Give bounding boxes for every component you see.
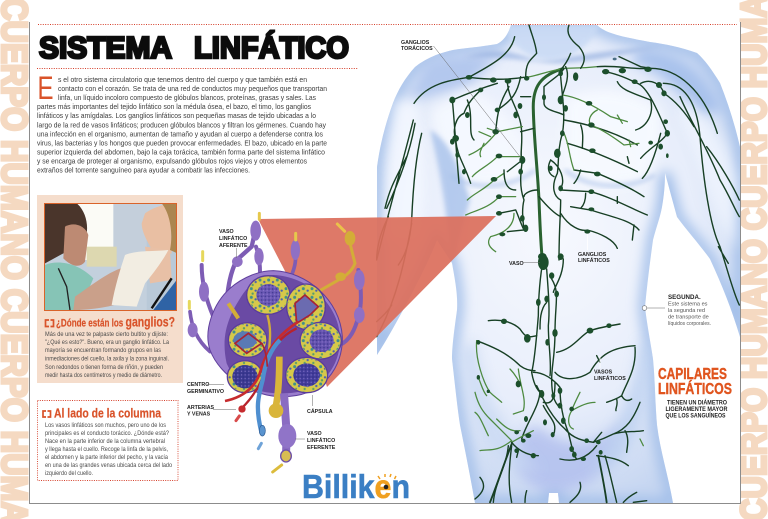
panel text: en una de las grandes venas ubicada cerca del lado [45,462,172,469]
label: ganglios linfaticos [578,234,610,264]
body figure [377,25,740,503]
lymphatic vessels of the arms [663,83,739,305]
label: vaso linfatico eferente: LINFÁTICO [307,437,335,444]
callout: segunda [642,294,711,327]
label: centro germinativo [187,382,224,395]
label: ganglios toracicos [401,40,521,158]
label: centro germinativo: GERMINATIVO [187,389,224,395]
label: vaso linfatico aferente: LINFÁTICO [219,235,247,242]
callout: capilares linfaticos [658,366,732,420]
dotted rule top [38,24,737,26]
label: vaso: VASO [509,261,524,267]
label: arterias y venas: Y VENAS [187,412,211,418]
intro text block: extraños del torrente sanguíneo para ayudar a combatir las infecciones. [37,166,250,174]
label: vaso linfatico eferente [295,431,336,451]
label: capsula [307,395,333,415]
panel text: Más de una vez te palpaste cierto bultito y dijiste: [45,331,168,338]
label: vaso linfatico aferente: VASO [219,229,234,235]
icon: bracket [46,320,54,326]
photo: doctor palpating neck [44,203,177,310]
label: ganglios toracicos: GANGLIOS [401,40,430,46]
label: vasos linfaticos: VASOS [594,370,613,376]
intro text block: una infección en el organismo, aumentan de tamaño y ayudan al cuerpo a defenderse contra los [37,129,323,138]
label: vaso linfatico eferente: EFERENTE [307,445,336,451]
lymphatic vessels of the chest and arms [414,25,717,260]
panel text: medir hasta dos centímetros y medio de diámetro. [45,372,162,379]
arrows [189,213,345,472]
hilum vessels [225,303,298,455]
panel text: el abdomen y la parte inferior del pecho, y la vacía [45,454,168,461]
label: vaso linfatico aferente: AFERENTE [219,243,248,249]
lymphatic vessels of the abdomen and pelvis [475,255,647,502]
label: arterias y venas: ARTERIAS [187,405,215,411]
label: arterias y venas [187,405,236,418]
intro text block: superior izquierda del abdomen, bajo la caja torácica, también forma parte del sistema linfático [37,147,325,156]
callout: segunda: la segunda red [668,308,705,314]
intro text block: linfa, un líquido incoloro compuesto de glóbulos blancos, proteínas, grasas y sales. Las [58,93,316,102]
intro text block: s el otro sistema circulatorio que tenemos dentro del cuerpo y que también está en [58,75,307,84]
label: vaso [509,261,540,267]
magnification wedge [258,216,496,387]
label: vaso linfatico aferente [219,229,248,258]
lobules [227,276,341,393]
panel heading: ¿Dónde están los ganglios? [56,314,175,330]
callout: segunda: SEGUNDA. [668,294,701,301]
label: centro germinativo: CENTRO [187,382,209,388]
callout: capilares linfaticos: QUE LOS SANGUÍNEOS [666,412,726,420]
lymph node illustration [188,213,365,472]
panel text: principales es el conducto torácico. ¿Dónde está? [45,430,169,437]
intro text block: largo de la red de vasos linfáticos; producen glóbulos blancos y filtran los gérmenes. Cuando hay [37,120,326,129]
label: ganglios linfaticos: GANGLIOS [578,252,607,258]
panel text [45,422,172,477]
intro text block: partes más importantes del tejido linfático son la médula ósea, el bazo, el timo, los ganglios [37,102,311,111]
Billiken logo: Billiken [302,468,410,505]
panel text: Son redondos o tienen forma de riñón, y pueden [45,364,163,371]
intro text block: contacto con el corazón. Se trata de una red de conductos muy pequeños que transportan [58,84,327,93]
label: ganglios toracicos: TORÁCICOS [401,45,433,52]
callout: capilares linfaticos: CAPILARES [658,366,727,383]
panel text: Nace en la parte inferior de la columna vertebral [45,438,165,445]
label: vaso linfatico eferente: VASO [307,431,322,437]
intro text block [37,70,327,174]
panel text [45,331,169,379]
panel text: mayoría se encuentran formando grupos en las [45,347,162,354]
callout: capilares linfaticos: LIGERAMENTE MAYOR [666,406,728,413]
lymph nodes of the chest [450,58,670,260]
dotted rule under title [37,68,358,70]
callout: segunda: Este sistema es [668,302,708,308]
title: SISTEMA [39,30,172,65]
intro text block: linfáticos y las amígdalas. Los ganglios linfáticos son pequeñas masas de tejido ubicadas a lo [37,111,316,120]
callout: capilares linfaticos: LINFÁTICOS [658,381,732,398]
label: capsula: CÁPSULA [307,408,333,415]
title [39,30,349,65]
label: ganglios linfaticos: LINFÁTICOS [578,257,610,264]
label: vasos linfaticos [594,356,626,382]
label: vasos linfaticos: LINFÁTICOS [594,375,626,382]
callout: segunda: de transporte de [668,314,709,320]
panel text: inmediaciones del cuello, la axila y la zona inguinal. [45,355,169,362]
intro text block: virus, las bacterias y los hongos que pueden provocar enfermedades. El bazo, ubicado en la parte [37,138,327,147]
panel: donde estan los ganglios [37,195,183,383]
drop cap: E [38,70,54,106]
panel: al lado de la columna [38,400,178,480]
panel text: y llega hasta el cuello. Recoge la linfa de la pelvis, [45,446,168,453]
afferent vessels [188,221,365,352]
callout: capilares linfaticos: TIENEN UN DIÁMETRO [667,400,727,406]
panel text: izquierdo del cuello. [45,470,93,477]
panel heading: Al lado de la columna [54,406,162,420]
panel text: "¿Qué es esto?". Bueno, era un ganglio linfático. La [45,339,169,346]
callout: segunda: líquidos corporales. [668,321,711,327]
panel text: Los vasos linfáticos son muchos, pero uno de los [45,422,167,429]
capsule [208,271,342,397]
intro text block: y se encarga de proteger al organismo, expulsando glóbulos rojos viejos y otros elementos [37,156,307,166]
icon: bracket [43,411,50,417]
title: LINFÁTICO [194,30,349,65]
